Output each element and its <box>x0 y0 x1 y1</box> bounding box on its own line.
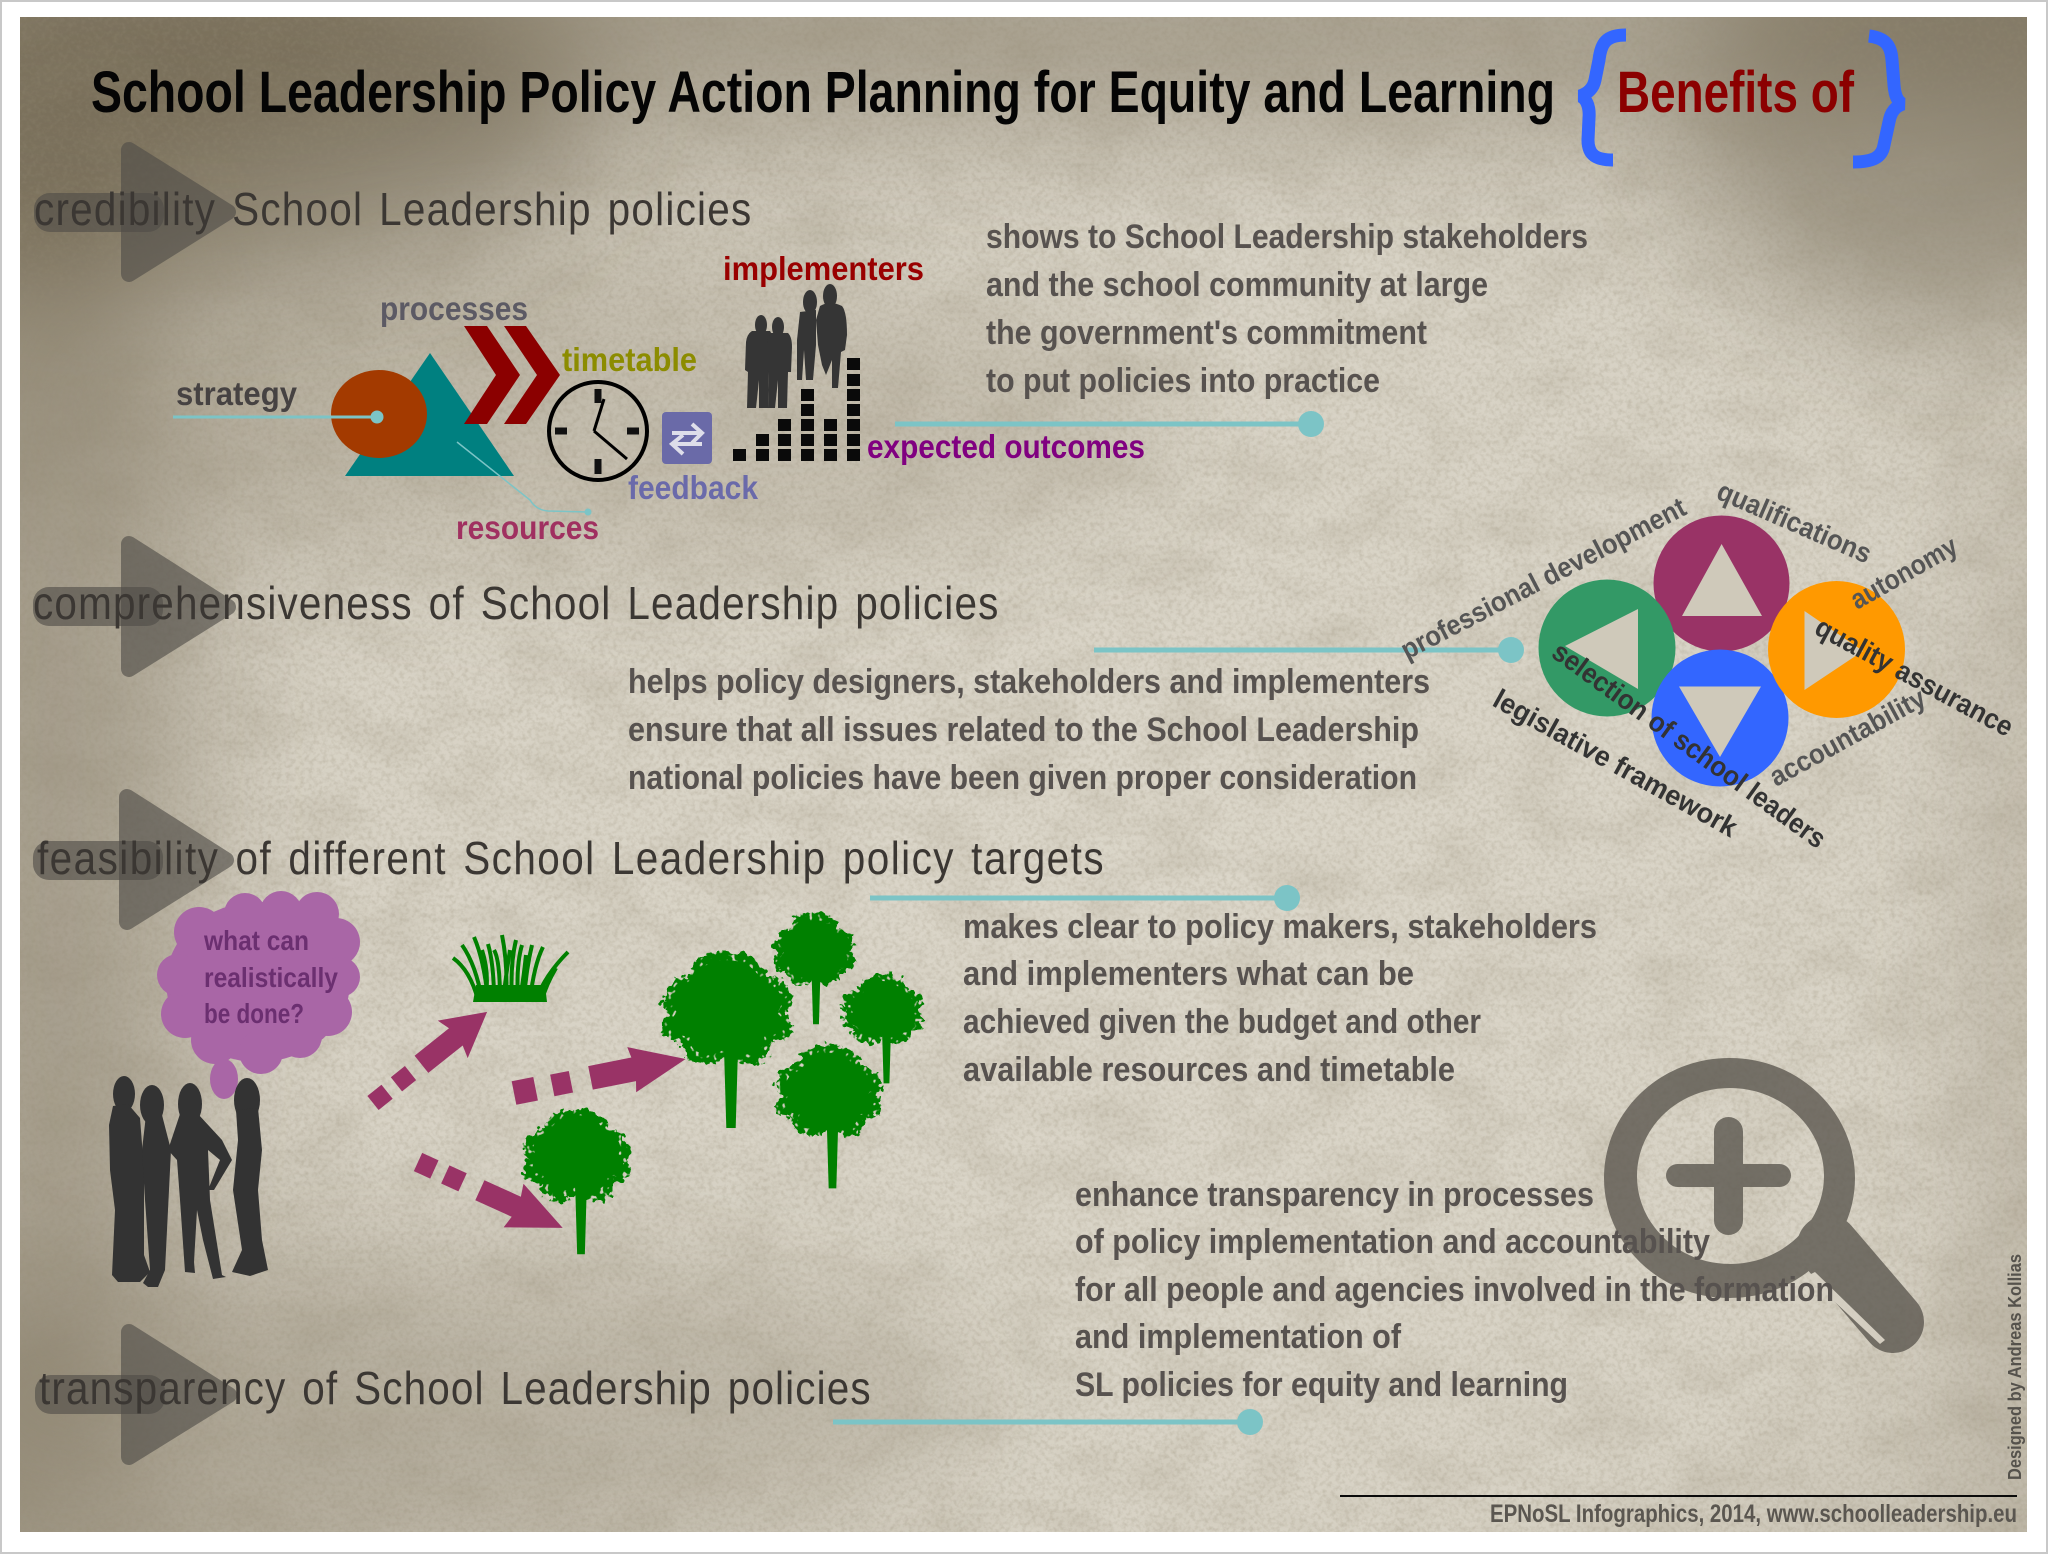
text block: feasibility: achieved given the budget and other <box>963 1003 1481 1041</box>
label: feedback: feedback <box>628 469 759 506</box>
arrow: feasibility <box>33 797 226 922</box>
label: quality assurance: quality assurance <box>1810 611 2019 743</box>
dashed arrow to forest <box>510 1036 690 1116</box>
icon: single tree <box>523 1108 631 1254</box>
text block: transparency <box>1075 1176 1834 1404</box>
benefits of: Benefits of <box>1617 60 1855 125</box>
title: School Leadership Policy Action Planning for Equity and Learning <box>91 60 1555 125</box>
circle: blue <box>1652 650 1788 786</box>
text block: transparency: SL policies for equity and learning <box>1075 1366 1568 1404</box>
connector line 2 <box>1094 637 1524 663</box>
text block: transparency: enhance transparency in processes <box>1075 1176 1594 1214</box>
heading: transparency: transparency of School Leadership policies <box>39 1364 871 1415</box>
text block: feasibility: makes clear to policy makers, stakeholders <box>963 908 1597 946</box>
arrow: comprehensiveness <box>33 544 228 669</box>
connector line 3 <box>870 885 1300 911</box>
label: expected outcomes: expected outcomes <box>867 428 1145 465</box>
text block: credibility: to put policies into practice <box>986 362 1380 400</box>
group of people silhouettes <box>109 1076 268 1287</box>
cloud shape <box>157 891 360 1099</box>
text block: feasibility <box>963 908 1597 1089</box>
text block: credibility <box>986 218 1588 400</box>
icon: forest of trees <box>661 913 923 1188</box>
text block: transparency: for all people and agencies involved in the formation <box>1075 1271 1834 1309</box>
footer rule <box>1340 1495 2017 1497</box>
text block: transparency: and implementation of <box>1075 1318 1402 1356</box>
dashed arrow to tree <box>408 1140 573 1250</box>
thought text <box>203 925 338 1029</box>
text block: feasibility: available resources and timetable <box>963 1051 1455 1089</box>
label: accountability: accountability <box>1764 682 1931 792</box>
feedback icon <box>662 412 712 464</box>
circle: green <box>1538 580 1676 716</box>
text block: comprehensiveness: national policies have been given proper consideration <box>628 759 1417 797</box>
text block: credibility: the government's commitment <box>986 314 1427 352</box>
label: resources: resources <box>456 509 599 546</box>
icon: grass <box>453 935 568 1002</box>
clock icon <box>549 382 647 480</box>
thought bubble <box>157 891 360 1099</box>
label: implementers: implementers <box>723 250 924 287</box>
thought text: what can <box>203 925 309 956</box>
connector line 1 <box>895 411 1324 437</box>
left brace <box>1580 35 1626 160</box>
benefits heading with braces <box>1580 35 1903 162</box>
text block: comprehensiveness <box>628 663 1430 797</box>
thought text: be done? <box>204 998 304 1029</box>
expected outcomes bar chart <box>733 358 860 461</box>
heading: credibility: credibility School Leadership policies <box>34 185 751 236</box>
thought text: realistically <box>204 962 338 993</box>
label: selection of school leaders: selection of school leaders <box>1546 636 1832 854</box>
designer credit: Designed by Andreas Kollias <box>2005 1254 2025 1480</box>
label: professional development: professional development <box>1395 491 1691 665</box>
heading: comprehensiveness: comprehensiveness of School Leadership policies <box>33 579 998 630</box>
diagram: policy action plan elements <box>173 250 1145 546</box>
connector line 4 <box>833 1409 1263 1435</box>
implementers silhouettes <box>745 284 847 408</box>
diagram: policy issue circles <box>1395 475 2019 854</box>
label: processes: processes <box>380 290 528 327</box>
label: timetable: timetable <box>562 341 697 378</box>
label: legislative framework: legislative framework <box>1488 683 1743 843</box>
processes chevrons <box>464 326 560 424</box>
resources triangle <box>345 353 514 476</box>
circle: orange <box>1768 581 1905 718</box>
arrow: credibility <box>34 150 228 274</box>
magnifier icon <box>1604 1058 1893 1344</box>
circle: purple <box>1654 516 1790 652</box>
strategy circle <box>331 370 427 458</box>
text block: feasibility: and implementers what can be <box>963 955 1414 993</box>
text block: credibility: shows to School Leadership stakeholders <box>986 218 1588 256</box>
text block: transparency: of policy implementation and accountability <box>1075 1223 1710 1261</box>
resources leader line <box>457 442 592 516</box>
dashed arrow to grass <box>358 993 502 1122</box>
right brace <box>1853 36 1903 162</box>
text block: comprehensiveness: ensure that all issues related to the School Leadership <box>628 711 1419 749</box>
arrow: transparency <box>35 1332 229 1457</box>
label: autonomy: autonomy <box>1845 530 1963 615</box>
heading: feasibility: feasibility of different School Leadership policy targets <box>37 834 1104 885</box>
label: qualifications: qualifications <box>1713 475 1876 569</box>
text block: credibility: and the school community at large <box>986 266 1488 304</box>
strategy leader line <box>173 410 384 424</box>
text block: comprehensiveness: helps policy designers, stakeholders and implementers <box>628 663 1430 701</box>
label: strategy: strategy <box>176 375 298 412</box>
